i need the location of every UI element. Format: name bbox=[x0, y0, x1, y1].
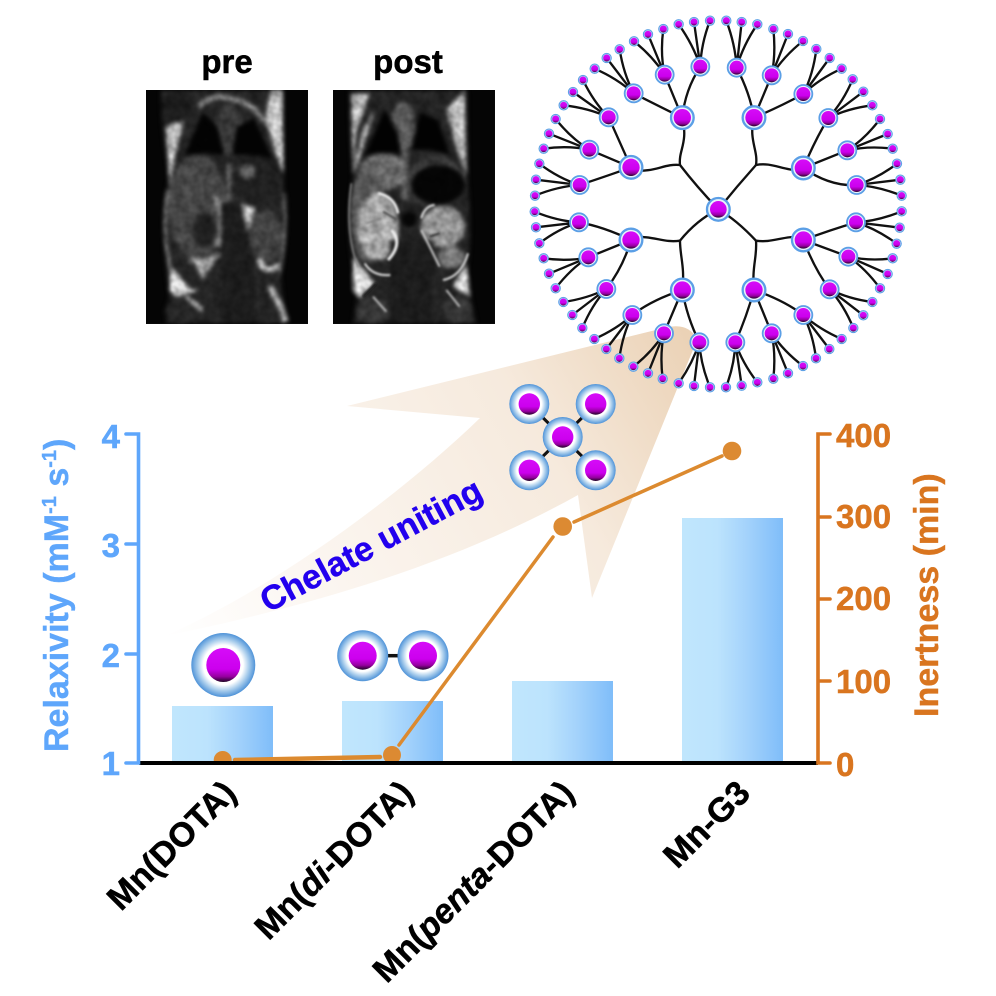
MRI scan: post bbox=[333, 90, 495, 325]
right axis: inertness bbox=[818, 417, 891, 783]
right axis: inertness: 400 bbox=[836, 417, 891, 454]
left axis: relaxivity: 4 bbox=[102, 418, 121, 455]
dendrimer: Mn-G3 bbox=[530, 16, 906, 392]
left axis: relaxivity: 3 bbox=[102, 527, 120, 564]
arrow: chelate uniting bbox=[165, 326, 697, 636]
icon: four-armed chelate cluster bbox=[509, 384, 616, 490]
label: pre: pre bbox=[201, 43, 253, 80]
x label: Mn-G3: Mn-G3 bbox=[656, 774, 758, 875]
left axis: relaxivity: 1 bbox=[102, 745, 120, 782]
bar chart: relaxivity bars bbox=[172, 518, 783, 763]
x label: Mn(DOTA): Mn(DOTA) bbox=[100, 774, 244, 918]
dendrimer branches bbox=[535, 21, 902, 387]
right axis title: Inertness (min) bbox=[908, 473, 946, 717]
core and first-generation chelates bbox=[620, 106, 815, 301]
left axis title: -1 bbox=[39, 496, 61, 514]
left axis title: Relaxivity (mM bbox=[38, 514, 76, 752]
x label: Mn(di-DOTA): Mn(di-DOTA) bbox=[247, 774, 421, 947]
MRI scan: pre bbox=[146, 90, 308, 326]
left axis: relaxivity bbox=[102, 418, 138, 782]
right axis: inertness: 300 bbox=[836, 498, 891, 535]
line chart: inertness bbox=[214, 442, 741, 769]
left axis title: -1 bbox=[39, 450, 61, 468]
label: post: post bbox=[373, 43, 443, 80]
text: Chelate uniting: Chelate uniting bbox=[254, 471, 489, 620]
left axis title: s bbox=[38, 468, 76, 496]
x label: Mn(penta-DOTA): Mn(penta-DOTA) bbox=[366, 774, 582, 990]
x axis baseline bbox=[139, 761, 818, 765]
left axis: relaxivity: 2 bbox=[102, 637, 120, 674]
right axis: inertness: 200 bbox=[836, 580, 891, 617]
outer-shell chelates bbox=[530, 16, 906, 392]
right axis: inertness: 100 bbox=[836, 663, 891, 700]
second-generation chelates bbox=[570, 58, 866, 351]
left axis title: ) bbox=[38, 439, 76, 450]
icon: two linked chelates bbox=[337, 630, 448, 681]
icon: single chelate bbox=[191, 633, 255, 697]
right axis: inertness: 0 bbox=[836, 746, 854, 783]
